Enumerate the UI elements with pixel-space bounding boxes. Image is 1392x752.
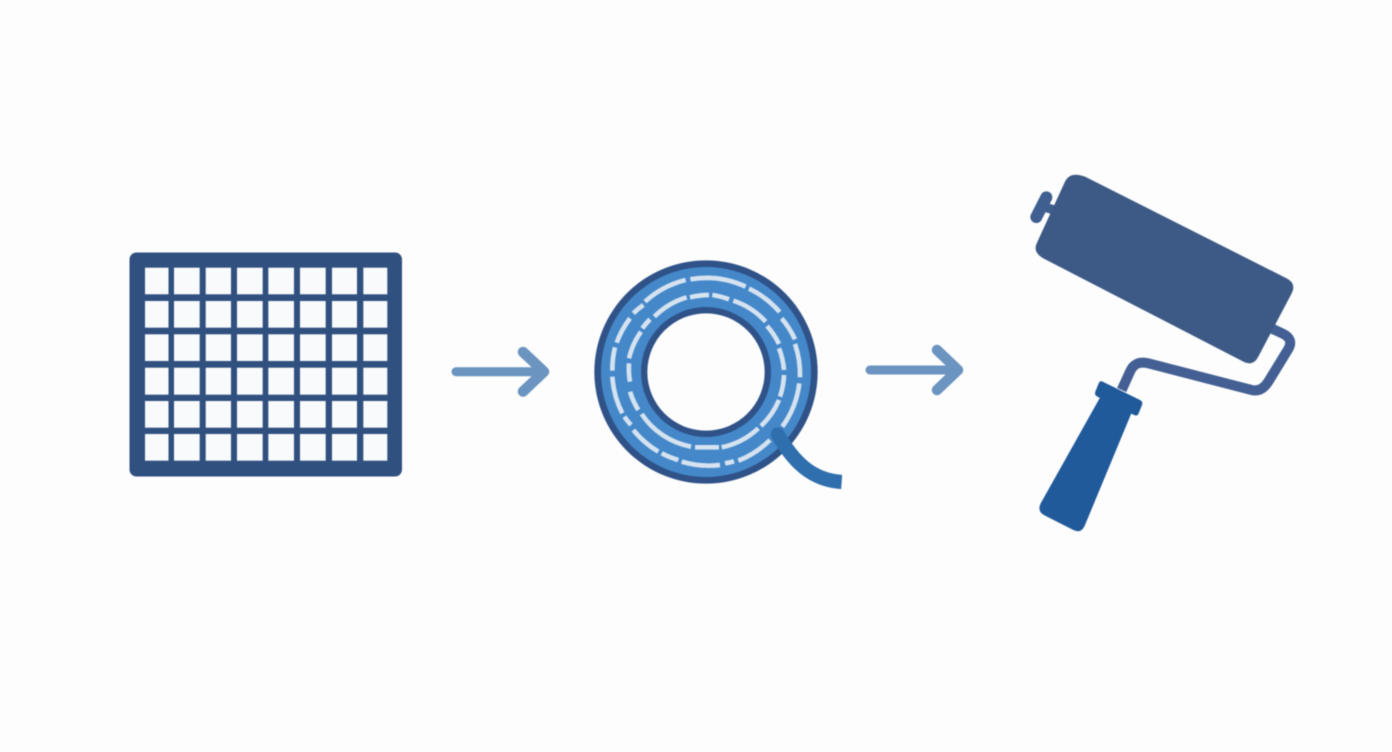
roller frame arm bbox=[1122, 328, 1290, 390]
arrow: tape to roller bbox=[870, 350, 958, 390]
roller end knob bbox=[1036, 197, 1062, 217]
icon: tape roll bbox=[594, 260, 842, 484]
tape roll body bbox=[594, 260, 818, 484]
icon: mesh grid bbox=[130, 252, 402, 476]
tape dashed stitching bbox=[612, 278, 800, 466]
arrow: mesh to tape bbox=[456, 352, 544, 392]
roller handle bbox=[1039, 381, 1142, 531]
roller cover bbox=[1036, 175, 1293, 363]
icon: paint roller bbox=[1036, 175, 1293, 531]
tape loose end bbox=[771, 427, 842, 482]
